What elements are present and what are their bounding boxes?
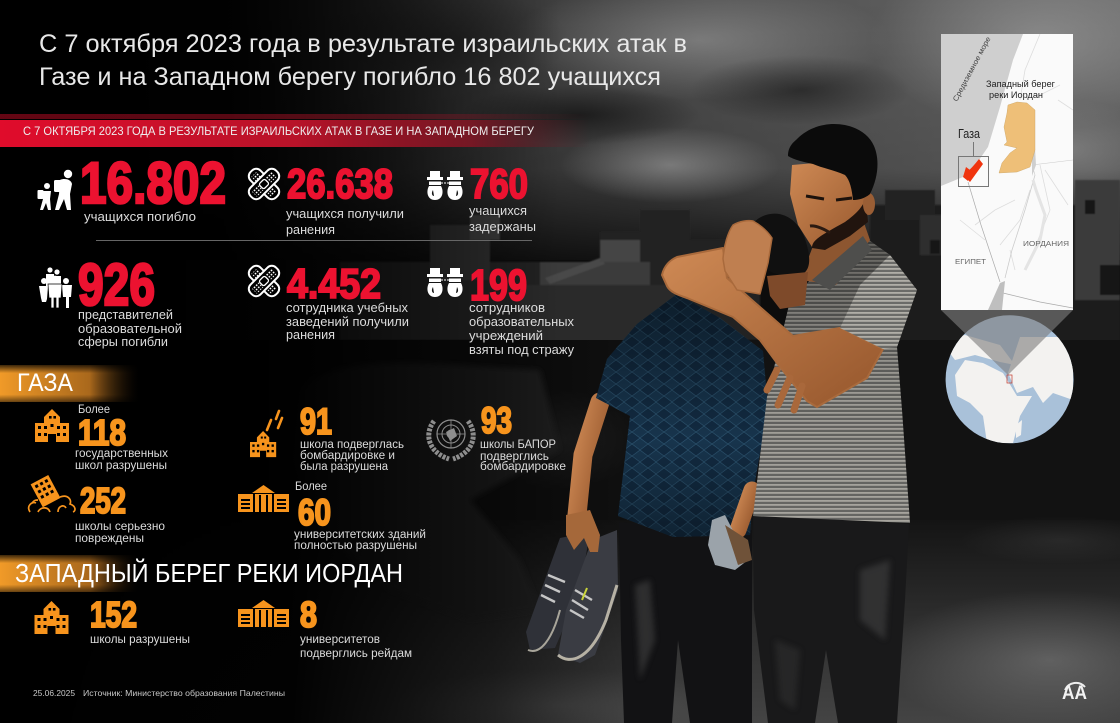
boy left hand — [566, 510, 600, 552]
Egypt border — [968, 182, 1000, 282]
stat: West Bank schools: 152 — [90, 594, 137, 635]
stat: students killed: 16.802 — [80, 151, 226, 216]
stat: staff wounded — [246, 260, 409, 342]
stat: staff detained — [427, 261, 575, 357]
stat: staff detained: взяты под стражу — [469, 343, 575, 357]
main title: Газе и на Западном берегу погибло 16 802 учащихся — [39, 63, 661, 91]
stat: students wounded: 26.638 — [287, 160, 393, 207]
icon: handcuffs — [427, 171, 463, 200]
stat: UNRWA schools: школы БАПОР — [480, 439, 556, 451]
stat: students wounded: учащихся получили — [286, 207, 404, 221]
stat: school bombed: была разрушена — [300, 461, 389, 473]
icon: school — [34, 601, 68, 634]
boy left arm — [577, 402, 600, 515]
heading: Gaza: ГАЗА — [17, 369, 73, 397]
stat: West Bank universities: подверглись рейдам — [300, 648, 412, 660]
locator map: реки Иордан — [989, 90, 1043, 100]
funnel — [941, 310, 1073, 375]
stat: West Bank schools: школы разрушены — [90, 634, 190, 646]
stat: school bombed: школа подверглась — [300, 439, 404, 451]
stat: West Bank schools — [34, 594, 190, 646]
stat: education staff killed: сферы погибли — [78, 335, 168, 349]
icon: university — [238, 485, 289, 512]
icon: bandage — [246, 166, 282, 202]
stat: students wounded: ранения — [286, 223, 335, 237]
stat: school bombed — [250, 401, 404, 473]
stat: state schools destroyed: Более — [78, 404, 110, 416]
man neck — [800, 220, 870, 285]
footer source: Источник: Министерство образования Палестины — [83, 688, 285, 698]
stat: students wounded — [246, 160, 404, 237]
icon: university — [238, 600, 289, 627]
boy head — [747, 214, 809, 276]
water bottle — [708, 515, 748, 570]
logo: AA: AA — [1062, 683, 1087, 704]
Gaza strip — [966, 159, 983, 182]
stat: university buildings destroyed: университетских зданий — [294, 529, 426, 541]
stat: state schools destroyed: 118 — [78, 412, 126, 453]
stat: education staff killed — [39, 252, 182, 349]
stat: education staff killed: 926 — [78, 252, 155, 318]
locator map — [941, 34, 1073, 310]
stat: staff detained: образовательных — [469, 315, 575, 329]
stat: staff wounded: ранения — [286, 328, 335, 342]
man head — [788, 124, 877, 250]
boy jeans — [619, 522, 752, 723]
stat: staff detained: учреждений — [469, 329, 543, 343]
locator globe — [940, 310, 1074, 443]
stat: school bombed: бомбардировке и — [300, 450, 395, 462]
stat: staff detained: 199 — [470, 261, 527, 310]
Gulf — [988, 281, 1005, 310]
icon: collapsing building — [29, 475, 75, 512]
icon: bandage — [246, 263, 282, 299]
main title — [39, 30, 687, 91]
shoes — [526, 530, 618, 663]
West Bank shape — [999, 102, 1035, 173]
footer source: 25.06.2025 — [33, 688, 75, 698]
stat: university buildings destroyed: полностью разрушены — [294, 540, 417, 552]
stat: schools damaged: 252 — [80, 480, 126, 521]
stat: UNRWA schools: подверглись — [480, 451, 549, 463]
man jeans — [753, 515, 909, 723]
embracing arms — [662, 248, 883, 407]
man shirt — [753, 236, 917, 523]
boy right arm — [738, 490, 752, 530]
stat: university buildings destroyed — [238, 481, 426, 552]
heading: West Bank: ЗАПАДНЫЙ БЕРЕГ РЕКИ ИОРДАН — [15, 558, 403, 588]
stat: schools damaged: школы серьезно — [75, 521, 165, 533]
icon: family — [39, 267, 72, 308]
icon: school — [35, 409, 69, 442]
heading: West Bank — [0, 555, 403, 592]
stat: UNRWA schools: бомбардировке — [480, 461, 566, 473]
icon: students — [38, 170, 72, 210]
stat: UNRWA schools — [429, 400, 566, 473]
icon: school under bombs — [250, 411, 282, 457]
locator map: Средиземное море — [951, 35, 993, 103]
locator map: Западный берег — [986, 79, 1056, 89]
stat: West Bank universities: 8 — [300, 594, 317, 635]
locator map: Газа — [958, 127, 980, 141]
stat: students killed — [38, 151, 226, 224]
photo: boy and man embracing — [526, 124, 917, 723]
boy sweater — [596, 294, 768, 537]
stat: state schools destroyed: школ разрушены — [75, 460, 167, 472]
stat: staff detained: сотрудников — [469, 301, 545, 315]
icon: handcuffs — [427, 268, 463, 297]
stat: students detained: учащихся — [469, 204, 527, 218]
stat: state schools destroyed: государственных — [75, 448, 168, 460]
stat: school bombed: 91 — [300, 401, 332, 442]
sea — [941, 34, 1023, 186]
man collar — [812, 236, 872, 290]
stat: UNRWA schools: 93 — [481, 400, 512, 441]
stat: staff wounded: заведений получили — [286, 315, 409, 329]
stat: university buildings destroyed: Более — [295, 481, 327, 493]
locator map: ЕГИПЕТ — [955, 257, 986, 266]
icon: UN emblem — [429, 420, 473, 459]
boy fingers — [767, 370, 802, 410]
Dead Sea — [1032, 148, 1036, 176]
stat: staff wounded: 4.452 — [287, 260, 381, 307]
man hand on boy head — [723, 221, 772, 294]
heading: Gaza — [0, 365, 138, 402]
red banner: С 7 ОКТЯБРЯ 2023 ГОДА В РЕЗУЛЬТАТЕ ИЗРАИЛЬСКИХ АТАК В ГАЗЕ И НА ЗАПАДНОМ БЕРЕГУ — [23, 124, 534, 138]
stat: education staff killed: образовательной — [78, 322, 182, 336]
stat: West Bank universities — [238, 594, 412, 660]
main title: С 7 октября 2023 года в результате израильских атак в — [39, 30, 687, 58]
stat: West Bank universities: университетов — [300, 634, 380, 646]
man sleeve — [840, 255, 917, 349]
stat: students detained — [427, 160, 536, 234]
stat: education staff killed: представителей — [78, 308, 173, 322]
red banner — [0, 114, 590, 147]
stat: students detained: задержаны — [469, 220, 536, 234]
locator map: ИОРДАНИЯ — [1023, 239, 1069, 248]
stat: staff wounded: сотрудника учебных — [286, 301, 409, 315]
stat: students detained: 760 — [470, 160, 528, 207]
stat: schools damaged — [29, 475, 165, 545]
Gaza box — [958, 156, 988, 186]
stat: university buildings destroyed: 60 — [298, 492, 331, 533]
stat: students killed: учащихся погибло — [84, 210, 196, 224]
stat: state schools destroyed — [35, 404, 168, 472]
stat: schools damaged: повреждены — [75, 533, 144, 545]
